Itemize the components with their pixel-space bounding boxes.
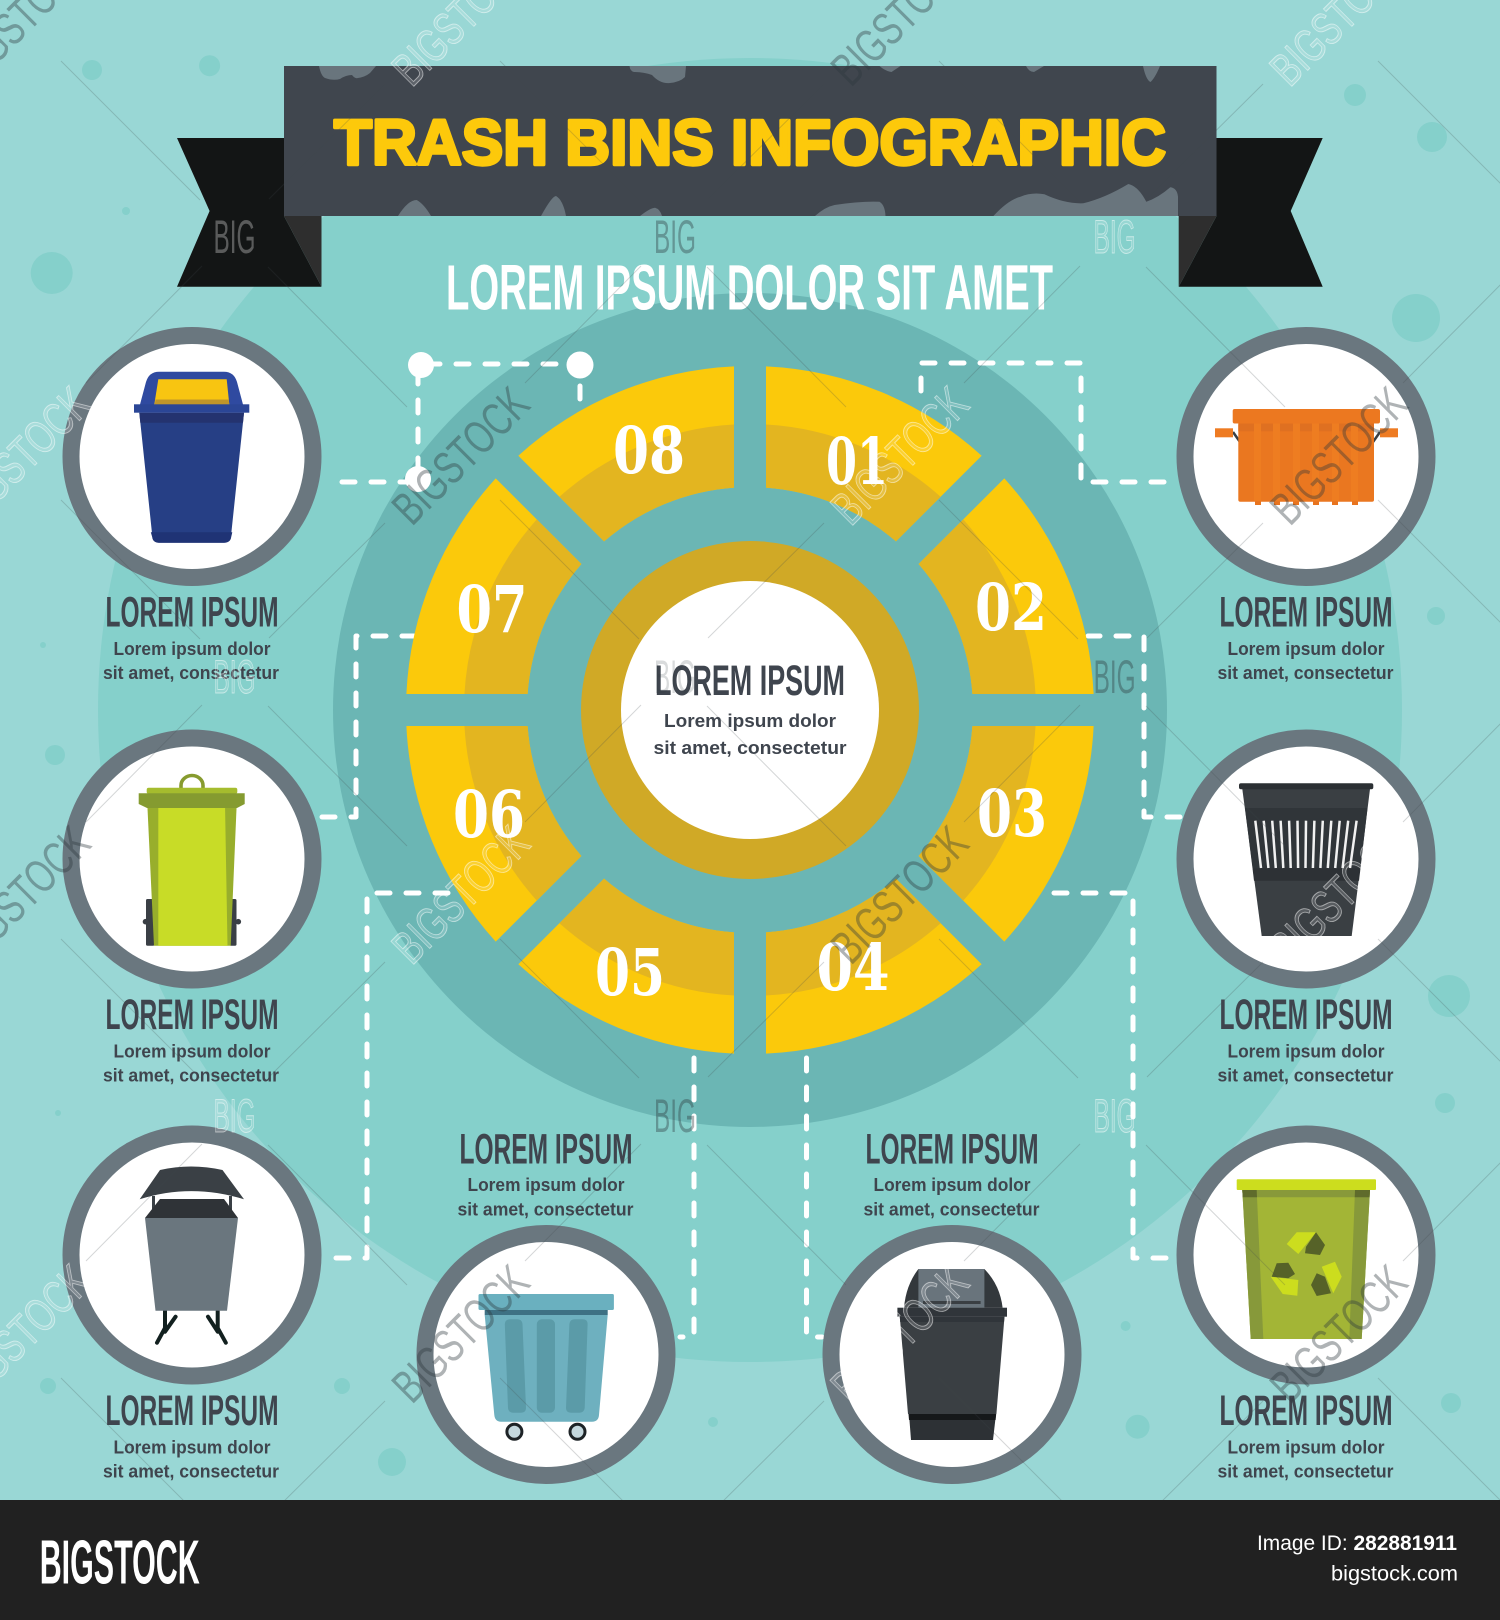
- icon: recycling bin: [1237, 1179, 1376, 1339]
- subtitle: LOREM IPSUM DOLOR SIT AMET: [446, 252, 1053, 324]
- watermark: BIG stamps: BIG: [654, 1089, 696, 1142]
- watermark: BIG stamps: BIG: [214, 650, 256, 703]
- footer bar: BIGSTOCK: [40, 1528, 200, 1597]
- center hub: sit amet, consectetur: [654, 738, 846, 758]
- segment 07: 07: [456, 572, 528, 648]
- panel: street bin with roof: [71, 1134, 313, 1482]
- banner body: [284, 66, 1216, 216]
- panel: street bin with roof: sit amet, consectetur: [103, 1462, 279, 1482]
- large background circle: [98, 58, 1402, 1362]
- segment 04: 04: [816, 930, 890, 1006]
- footer url: bigstock.com: [1331, 1562, 1458, 1586]
- watermark: BIG stamps: BIG: [1094, 650, 1136, 703]
- watermark: BIG stamps: BIG: [1094, 1089, 1136, 1142]
- panel: teal wheeled bin: sit amet, consectetur: [458, 1200, 634, 1220]
- watermark: BIGSTOCK stamps: BIGSTOCK: [382, 816, 539, 973]
- icon: teal wheeled bin: [478, 1294, 614, 1439]
- segment 01: 01: [826, 424, 888, 500]
- panel: blue bin: Lorem ipsum dolor: [114, 639, 270, 659]
- watermark: BIGSTOCK stamps: BIGSTOCK: [821, 1255, 978, 1412]
- segment 06: [343, 665, 619, 942]
- icon: street bin with roof: [140, 1166, 244, 1343]
- title: TRASH BINS INFOGRAPHIC: [334, 106, 1166, 178]
- segment 07: [406, 478, 581, 694]
- panel: black flip bin: sit amet, consectetur: [864, 1200, 1040, 1220]
- panel: recycling bin: [1185, 1134, 1427, 1482]
- panel: teal wheeled bin: LOREM IPSUM: [460, 1126, 632, 1174]
- panel: recycling bin: Lorem ipsum dolor: [1228, 1437, 1384, 1457]
- watermark: BIG stamps: BIG: [214, 210, 256, 263]
- watermark: BIGSTOCK stamps: BIGSTOCK: [382, 1255, 539, 1412]
- panel: black wastebasket: [1185, 738, 1427, 1086]
- watermark: BIG stamps: BIG: [214, 1089, 256, 1142]
- panel: blue bin: [71, 336, 313, 683]
- watermark: BIG stamps: BIG: [1094, 210, 1136, 263]
- segment 03: 03: [977, 776, 1047, 852]
- panel: green wheelie bin: sit amet, consectetur: [103, 1066, 279, 1086]
- panel: green wheelie bin: Lorem ipsum dolor: [114, 1041, 270, 1061]
- icon: orange dumpster: [1215, 409, 1398, 505]
- watermark: BIGSTOCK stamps: BIGSTOCK: [821, 377, 978, 534]
- dark wheel backing circle: [333, 293, 1167, 1127]
- panel: green wheelie bin: [71, 738, 313, 1086]
- panel: street bin with roof: Lorem ipsum dolor: [114, 1437, 270, 1457]
- segment 02: 02: [975, 570, 1047, 646]
- panel: blue bin: LOREM IPSUM: [106, 588, 278, 636]
- icon: green wheelie bin: [139, 776, 245, 946]
- ribbon tail left: [177, 138, 322, 287]
- icon: black flip-top bin: [897, 1269, 1007, 1440]
- segment 02: [881, 478, 1157, 755]
- segment 08: 08: [613, 413, 685, 489]
- panel: teal wheeled bin: Lorem ipsum dolor: [468, 1175, 624, 1195]
- image id: Image ID: 282881911: [1257, 1532, 1457, 1555]
- watermark: BIGSTOCK stamps: BIGSTOCK: [382, 377, 539, 534]
- panel: black flip bin: [831, 1126, 1073, 1476]
- panel: black flip bin: Lorem ipsum dolor: [874, 1175, 1030, 1195]
- watermark: BIG stamps: BIG: [654, 650, 696, 703]
- watermark: BIG stamps: [214, 210, 1136, 1142]
- watermark: BIGSTOCK stamps: BIGSTOCK: [1260, 377, 1417, 534]
- banner ribbon: [177, 66, 1323, 287]
- watermark: BIGSTOCK stamps: BIGSTOCK: [1260, 816, 1417, 973]
- footer bar: [0, 1500, 1500, 1620]
- panel: black flip bin: LOREM IPSUM: [866, 1126, 1038, 1174]
- panel: black wastebasket: sit amet, consectetur: [1218, 1066, 1394, 1086]
- segment 05: [518, 879, 734, 1054]
- panel: blue bin: sit amet, consectetur: [103, 663, 279, 683]
- segment 06: 06: [453, 777, 525, 853]
- panel: recycling bin: sit amet, consectetur: [1218, 1462, 1394, 1482]
- icon: blue swing-lid bin: [134, 372, 249, 543]
- connector lines: [322, 352, 1180, 1337]
- panel: orange dumpster: sit amet, consectetur: [1218, 663, 1394, 683]
- panel: orange dumpster: [1185, 336, 1427, 683]
- center hub: Lorem ipsum dolor: [664, 711, 836, 731]
- ribbon tail right: [1179, 138, 1323, 287]
- panel: black wastebasket: Lorem ipsum dolor: [1228, 1041, 1384, 1061]
- segment 03: [919, 726, 1094, 942]
- center hub: [581, 541, 919, 879]
- center hub: LOREM IPSUM: [655, 657, 845, 705]
- icon: black mesh wastebasket: [1239, 783, 1373, 936]
- panel: green wheelie bin: LOREM IPSUM: [106, 991, 278, 1039]
- watermark: BIGSTOCK stamps: BIGSTOCK: [821, 816, 978, 973]
- panel: street bin with roof: LOREM IPSUM: [106, 1387, 278, 1435]
- segment 04: [705, 841, 982, 1117]
- segment 01: [766, 366, 982, 541]
- watermark: BIG stamps: BIG: [654, 210, 696, 263]
- segment 05: 05: [595, 935, 665, 1011]
- segment 08: [518, 303, 795, 579]
- panel: teal wheeled bin: [425, 1126, 667, 1476]
- watermark: BIGSTOCK stamps: BIGSTOCK: [1260, 1255, 1417, 1412]
- panel: orange dumpster: Lorem ipsum dolor: [1228, 639, 1384, 659]
